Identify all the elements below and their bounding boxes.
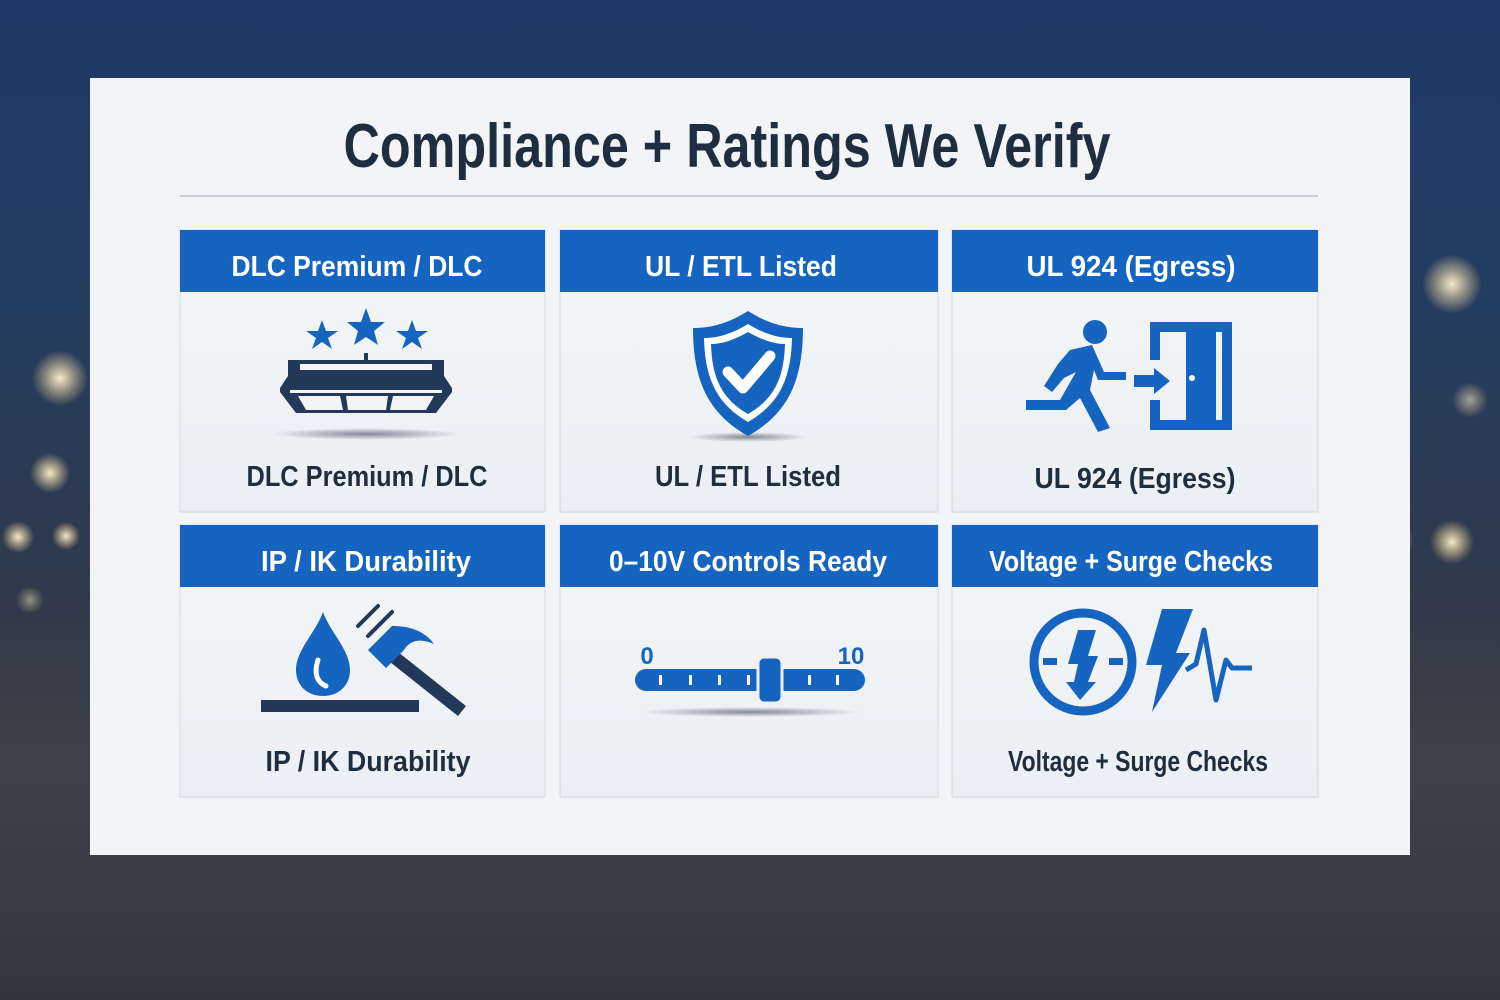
card: IP/IK bbox=[180, 525, 545, 797]
card: UL 924: UL 924 (Egress) bbox=[1026, 251, 1236, 283]
card: IP/IK: IP / IK Durability bbox=[266, 746, 470, 778]
icon: dimmer slider bbox=[635, 643, 865, 717]
card: UL 924 bbox=[952, 230, 1318, 512]
icon: surge bbox=[1034, 609, 1252, 712]
card: DLC bbox=[180, 230, 545, 512]
card: DLC: DLC Premium / DLC bbox=[232, 251, 483, 283]
title: Compliance + Ratings We Verify bbox=[344, 112, 1111, 181]
card: 0-10V: 0–10V Controls Ready bbox=[609, 546, 887, 578]
card: Voltage: Voltage + Surge Checks bbox=[989, 546, 1273, 578]
card: UL/ETL: UL / ETL Listed bbox=[655, 461, 841, 493]
icon: running man to exit door bbox=[1026, 320, 1232, 432]
icon: dimmer slider: 10 bbox=[838, 643, 864, 670]
icon: fixture with stars bbox=[271, 308, 461, 440]
card: UL/ETL: UL / ETL Listed bbox=[645, 251, 837, 283]
main panel bbox=[90, 78, 1410, 855]
card: UL/ETL bbox=[560, 230, 938, 512]
icon: dimmer slider: 0 bbox=[640, 643, 654, 670]
icon: drop and hammer bbox=[261, 606, 466, 716]
card: DLC: DLC Premium / DLC bbox=[246, 461, 488, 493]
card: Voltage bbox=[952, 525, 1318, 797]
card: Voltage: Voltage + Surge Checks bbox=[1008, 746, 1268, 778]
card: UL 924: UL 924 (Egress) bbox=[1034, 463, 1236, 495]
card: 0-10V bbox=[560, 525, 938, 797]
icon: shield check bbox=[688, 311, 808, 442]
card: IP/IK: IP / IK Durability bbox=[261, 546, 471, 578]
